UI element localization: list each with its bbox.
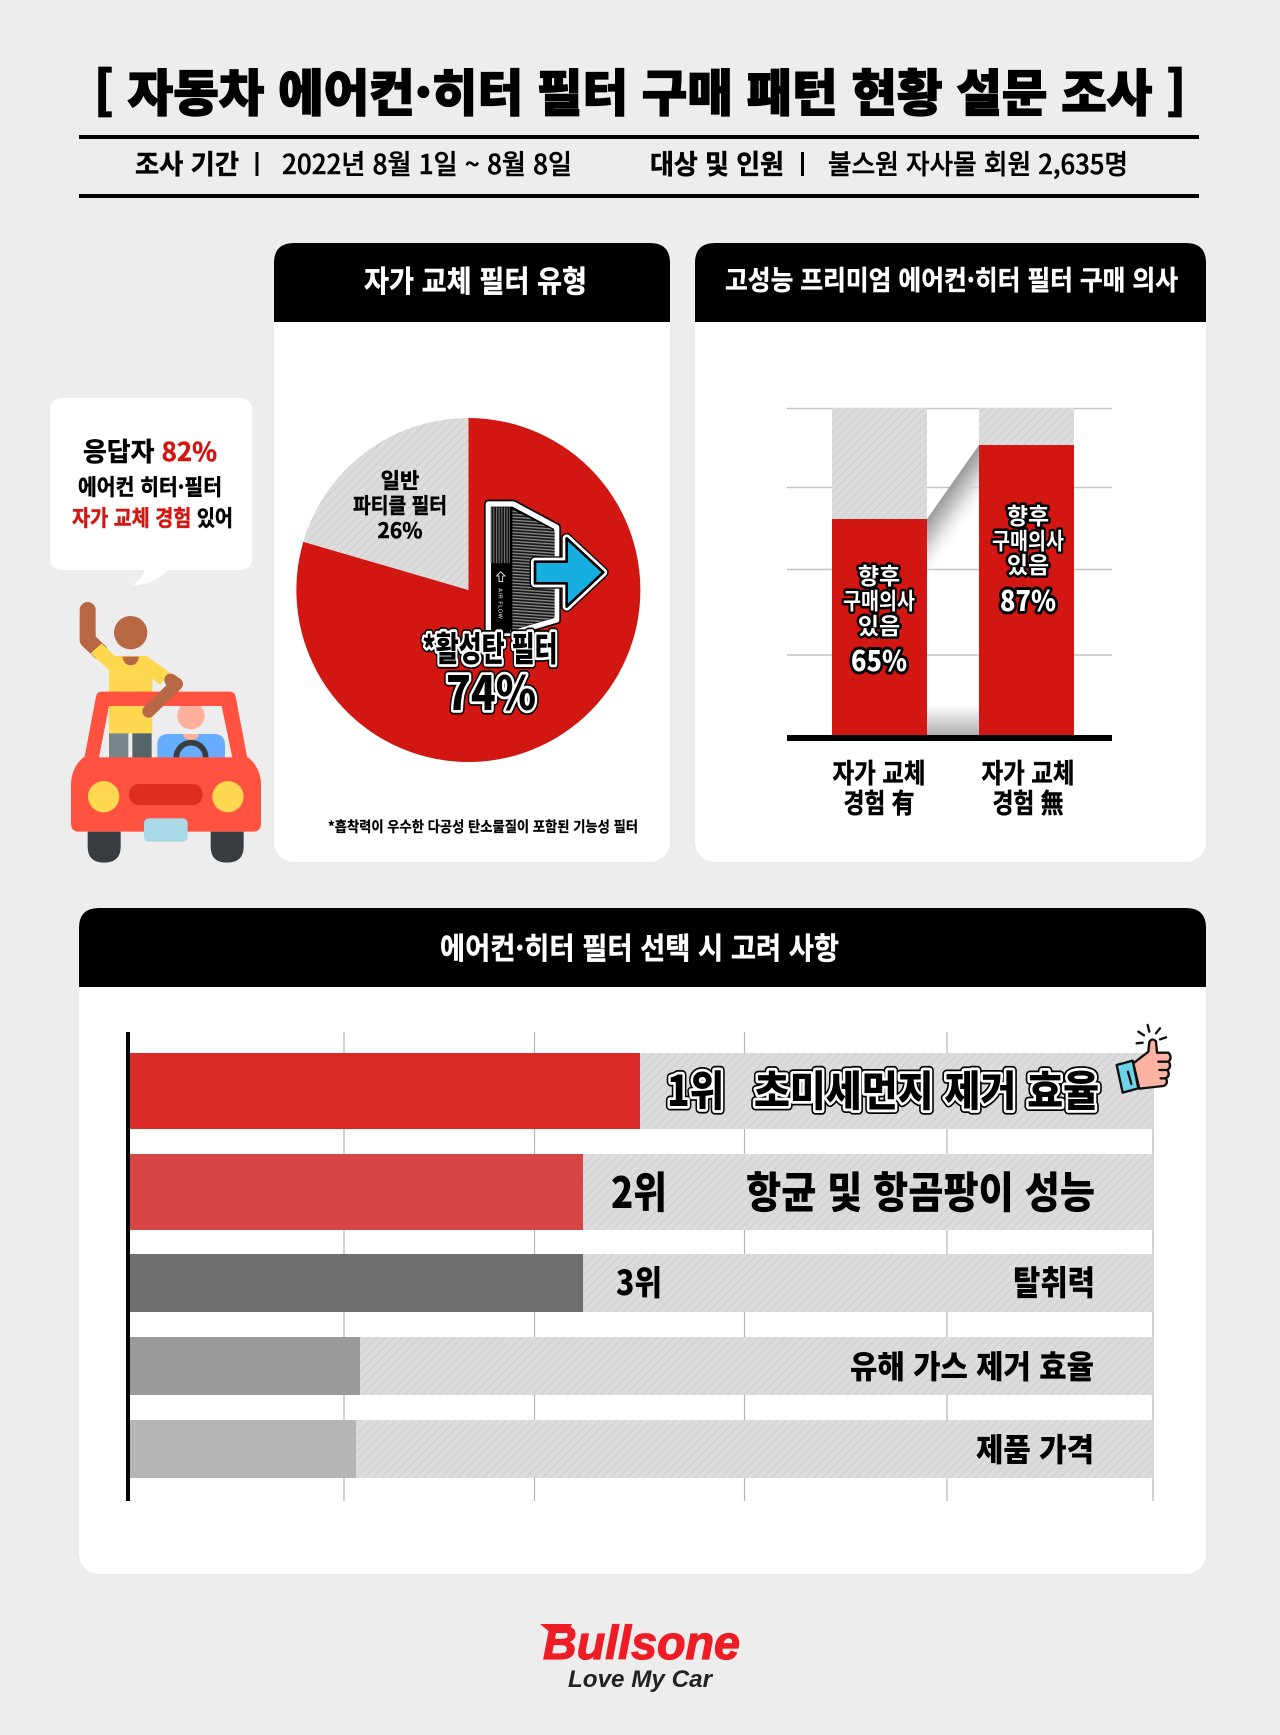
pie label: activated carbon filter 74%: 74% [446, 655, 536, 724]
pie label: particle filter 26%: 파티클 필터 [353, 490, 447, 520]
rank 1: ultrafine dust: 초미세먼지 제거 효율 [754, 1058, 1099, 1119]
stacked bar chart [787, 408, 1112, 741]
rank 1: ultrafine dust: 초미세먼지 제거 효율 [754, 1058, 1099, 1119]
callout: respondents 82%: 에어컨 히터·필터 [78, 470, 222, 502]
pie label: activated carbon filter 74%: *활성탄 필터 [422, 622, 558, 671]
axis labels [832, 752, 1074, 821]
panel heading: filter type: 자가 교체 필터 유형 [364, 257, 587, 301]
rank 1: ultrafine dust: 1위 [667, 1058, 724, 1119]
pie label: particle filter 26% [353, 465, 447, 545]
panel: purchase intent bars [695, 243, 1206, 862]
rank 1: ultrafine dust: 초미세먼지 제거 효율 [754, 1058, 1099, 1119]
pie chart [296, 418, 640, 762]
icon: activated carbon filter with arrow: AIR FLOW [497, 588, 503, 620]
rank 1: ultrafine dust: 1위 [667, 1058, 724, 1119]
bar label: without experience 87%: 87% [1000, 580, 1056, 620]
bar label: with experience 65%: 65% [851, 640, 907, 680]
rank 3: deodorizing [616, 1256, 1095, 1305]
pie label: particle filter 26%: 26% [377, 515, 423, 545]
footnote: *흡착력이 우수한 다공성 탄소물질이 포함된 기능성 필터 [328, 816, 638, 837]
panel heading: purchase intent: 고성능 프리미엄 에어컨·히터 필터 구매 의사 [725, 259, 1178, 298]
pie label: activated carbon filter 74% [422, 622, 558, 724]
bar label: with experience 65% [843, 557, 915, 680]
survey info bar: 대상 및 인원 [650, 143, 784, 182]
bar label: without experience 87% [992, 497, 1064, 620]
panel heading: selection factors [79, 908, 1206, 987]
survey info bar: 2022년 8월 1일 ~ 8월 8일 [282, 143, 572, 182]
rank 3: deodorizing: 탈취력 [1013, 1256, 1095, 1305]
horizontal bar chart [126, 1032, 1153, 1501]
logo: Bullsone [540, 1616, 740, 1693]
bar label: with experience 65%: 구매의사 [843, 582, 915, 616]
icon: thumbs up [1117, 1025, 1171, 1093]
callout: respondents 82%: 응답자 82% [83, 432, 217, 469]
title: [ 자동차 에어컨·히터 필터 구매 패턴 현황 설문 조사 ] [94, 54, 1186, 126]
pie label: activated carbon filter 74%: 74% [446, 655, 536, 724]
rank 3: deodorizing: 3위 [616, 1256, 662, 1305]
survey info bar: 조사 기간 [135, 143, 239, 182]
logo: Bullsone: Bullsone [543, 1616, 740, 1669]
logo: Bullsone: Love My Car [568, 1666, 714, 1693]
rank 5: price: 제품 가격 [976, 1425, 1094, 1471]
bar label: without experience 87%: 있음 [1007, 546, 1049, 580]
panel: filter type pie [274, 243, 670, 862]
axis labels: 자가 교체 [982, 752, 1074, 791]
pie label: activated carbon filter 74%: *활성탄 필터 [422, 622, 558, 671]
bar label: with experience 65%: 향후 [858, 557, 900, 591]
callout: respondents 82%: 자가 교체 경험 있어 [72, 501, 233, 533]
axis labels: 자가 교체 [832, 752, 926, 791]
rank 2: antibacterial: 2위 [611, 1159, 667, 1221]
icon: activated carbon filter with arrow [488, 504, 603, 633]
bar label: without experience 87%: 구매의사 [992, 522, 1064, 556]
bar label: with experience 65%: 있음 [858, 607, 900, 641]
panel heading: filter type [274, 243, 670, 322]
survey info bar: 불스원 자사몰 회원 2,635명 [828, 143, 1128, 182]
rank 4: harmful gas: 유해 가스 제거 효율 [850, 1342, 1094, 1388]
rank 2: antibacterial [611, 1159, 1095, 1221]
rank 2: antibacterial: 항균 및 항곰팡이 성능 [746, 1159, 1095, 1221]
rank 1: ultrafine dust: 1위 [667, 1058, 724, 1119]
icon: person waving from red car [71, 610, 261, 863]
pie label: activated carbon filter 74%: 74% [446, 655, 536, 724]
survey info bar [79, 135, 1199, 198]
pie label: activated carbon filter 74%: *활성탄 필터 [422, 622, 558, 671]
bar label: without experience 87%: 향후 [1007, 497, 1049, 531]
panel heading: purchase intent [695, 243, 1206, 322]
panel heading: selection factors: 에어컨·히터 필터 선택 시 고려 사항 [440, 924, 839, 968]
axis labels: 경험 無 [992, 782, 1064, 821]
axis labels: 경험 有 [844, 782, 914, 821]
pie label: particle filter 26%: 일반 [381, 465, 419, 495]
callout: respondents 82% [50, 398, 252, 585]
panel: selection factors [79, 908, 1206, 1574]
